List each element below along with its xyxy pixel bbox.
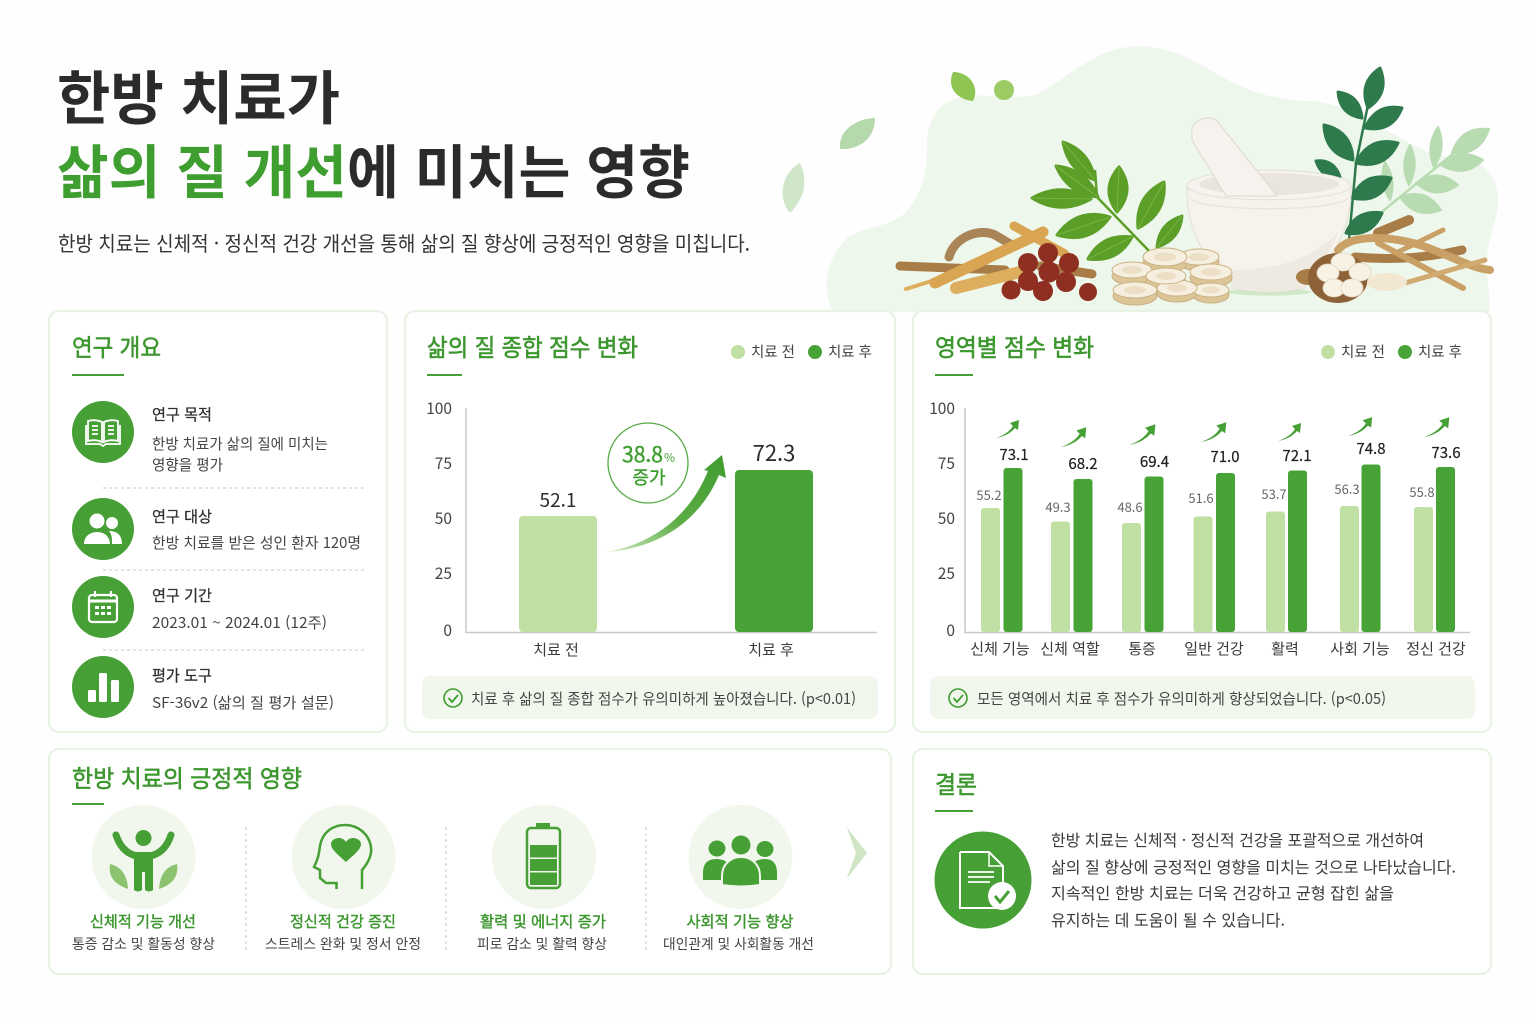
bar chart: 영역별: 0	[946, 619, 955, 641]
illustration: herbal medicine hero	[783, 46, 1498, 312]
conclusion text: 삶의 질 향상에 긍정적인 영향을 미치는 것으로 나타났습니다.	[1051, 854, 1456, 878]
legend: 치료 후	[828, 341, 872, 362]
conclusion text: 한방 치료는 신체적 · 정신적 건강을 포괄적으로 개선하여	[1051, 827, 1424, 851]
bar chart: 영역별: 48.6	[1117, 497, 1143, 516]
item: 연구 기간: 연구 기간	[152, 584, 212, 606]
note: 치료 후 삶의 질 종합 점수가 유의미하게 높아졌습니다. (p<0.01)	[471, 688, 856, 709]
bar chart: 종합 점수: 치료 전	[533, 639, 579, 660]
bar chart: 종합 점수: 50	[435, 507, 452, 529]
item: 정신적 건강 증진	[265, 805, 421, 954]
heading: 결론	[935, 765, 977, 800]
bar chart: 영역별: 신체 역할	[1040, 638, 1100, 659]
bar chart: 영역별: 활력	[1271, 638, 1299, 659]
item: 연구 목적: 영향을 평가	[152, 454, 223, 475]
icon: document check	[934, 832, 1032, 928]
panel: 삶의 질 종합 점수 변화	[405, 311, 895, 732]
panel: 연구 개요	[49, 311, 387, 732]
bar chart: 종합 점수: 72.3	[753, 436, 795, 468]
background blob	[827, 46, 1498, 312]
bar chart: 영역별: 69.4	[1140, 451, 1169, 472]
heading: 삶의 질 종합 점수 변화	[427, 328, 638, 363]
bar chart: 영역별: 72.1	[1282, 445, 1312, 466]
floating leaves	[783, 72, 1014, 213]
item: 연구 대상: 한방 치료를 받은 성인 환자 120명	[152, 532, 361, 553]
item: 사회적 기능 향상: 대인관계 및 사회활동 개선	[663, 934, 814, 954]
item: 정신적 건강 증진: 정신적 건강 증진	[290, 910, 396, 932]
bar chart: 영역별: 75	[938, 452, 955, 474]
item: 평가 도구: SF-36v2 (삶의 질 평가 설문)	[152, 692, 334, 713]
conclusion text: 지속적인 한방 치료는 더욱 건강하고 균형 잡힌 삶을	[1051, 880, 1394, 904]
legend: 치료 후	[1418, 341, 1462, 362]
bar chart: 영역별: 74.8	[1356, 438, 1386, 459]
item: 활력 및 에너지 증가: 활력 및 에너지 증가	[480, 910, 606, 932]
root slices	[1112, 248, 1232, 305]
arrow: chevron	[846, 827, 867, 879]
item: 연구 대상	[72, 498, 361, 560]
bar chart: 영역별: 신체 기능	[970, 638, 1030, 659]
item: 사회적 기능 향상: 사회적 기능 향상	[686, 910, 794, 932]
bar chart: 영역별: 49.3	[1045, 497, 1071, 516]
bar chart: 영역별: 71.0	[1210, 446, 1240, 467]
title	[57, 52, 690, 210]
heading: 영역별 점수 변화	[935, 328, 1094, 363]
legend	[1321, 341, 1462, 362]
heading: 연구 개요	[72, 328, 161, 363]
right roots	[1338, 220, 1490, 288]
callout: 38.8% 증가: %	[664, 449, 675, 466]
note	[422, 676, 878, 719]
bar chart: 영역별: 25	[938, 562, 955, 584]
title: 에 미치는 영향	[347, 126, 690, 210]
callout: 38.8% 증가	[608, 423, 688, 503]
legend: 치료 전	[751, 341, 795, 362]
item: 신체적 기능 개선: 통증 감소 및 활동성 향상	[72, 934, 215, 954]
subtitle: 한방 치료는 신체적 · 정신적 건강 개선을 통해 삶의 질 향상에 긍정적인 영향을 미칩니다.	[58, 227, 750, 257]
bar chart: 영역별: 68.2	[1068, 453, 1098, 474]
bar chart: 영역별: 73.6	[1431, 442, 1461, 463]
bar chart: 영역별: 50	[938, 507, 955, 529]
item: 활력 및 에너지 증가: 피로 감소 및 활력 향상	[477, 934, 607, 954]
bar chart: 영역별: 100	[929, 397, 955, 419]
heading: 한방 치료의 긍정적 영향	[72, 759, 302, 794]
left roots	[900, 226, 1092, 289]
arrow: increase	[607, 455, 726, 552]
bar chart: 영역별: 사회 기능	[1330, 638, 1390, 659]
note	[930, 676, 1475, 719]
item: 평가 도구	[72, 656, 334, 718]
bar chart: 종합 점수: 75	[435, 452, 452, 474]
legend: 치료 전	[1341, 341, 1385, 362]
note: 모든 영역에서 치료 후 점수가 유의미하게 향상되었습니다. (p<0.05)	[977, 688, 1386, 709]
item: 신체적 기능 개선: 신체적 기능 개선	[90, 910, 196, 932]
bar chart: 영역별: 통증	[1128, 638, 1156, 659]
bar chart: 종합 점수: 0	[443, 619, 452, 641]
callout: 38.8% 증가: 38.8	[622, 439, 663, 469]
bar chart: 영역별: 정신 건강	[1406, 638, 1466, 659]
legend	[731, 341, 872, 362]
bar chart: 영역별: 73.1	[999, 444, 1029, 465]
item: 연구 목적: 한방 치료가 삶의 질에 미치는	[152, 433, 328, 454]
panel: 영역별 점수 변화	[913, 311, 1491, 732]
item: 정신적 건강 증진: 스트레스 완화 및 정서 안정	[265, 934, 421, 954]
mortar and pestle	[1187, 118, 1351, 296]
item: 평가 도구: 평가 도구	[152, 664, 212, 686]
bar chart: 영역별: 53.7	[1261, 484, 1287, 503]
bar chart: 영역별: 일반 건강	[1184, 638, 1244, 659]
item: 연구 대상: 연구 대상	[152, 505, 212, 527]
bar chart: 영역별: 55.8	[1409, 482, 1435, 501]
panel: 결론	[913, 749, 1491, 974]
bar chart: 영역별: 55.2	[976, 485, 1002, 504]
item: 신체적 기능 개선	[72, 805, 215, 954]
small increase arrows	[996, 417, 1449, 447]
ginseng root slice	[1296, 253, 1407, 303]
red berries	[1002, 243, 1097, 301]
title: 한방 치료가	[57, 52, 340, 136]
green leaf branch	[1032, 142, 1182, 260]
title: 삶의 질 개선	[57, 126, 347, 210]
item: 활력 및 에너지 증가	[477, 805, 607, 954]
item: 연구 기간	[72, 576, 327, 638]
bar chart: 종합 점수	[426, 397, 877, 660]
light leaf branch	[1378, 127, 1489, 215]
bar chart: 종합 점수: 25	[435, 562, 452, 584]
bar chart: 종합 점수: 100	[426, 397, 452, 419]
bar chart: 영역별: 51.6	[1188, 488, 1214, 507]
item: 사회적 기능 향상	[663, 805, 814, 954]
panel: 한방 치료의 긍정적 영향	[49, 749, 891, 974]
bar chart: 종합 점수: 치료 후	[748, 639, 794, 660]
conclusion text: 유지하는 데 도움이 될 수 있습니다.	[1051, 907, 1285, 931]
item: 연구 목적: 연구 목적	[152, 403, 212, 425]
bar chart: 종합 점수: 52.1	[540, 486, 576, 513]
conclusion text	[1051, 827, 1456, 931]
bar chart: 영역별: 56.3	[1334, 479, 1360, 498]
bar chart: 영역별	[929, 397, 1470, 659]
dark leaf branch	[1316, 68, 1402, 240]
item: 연구 목적	[72, 401, 328, 475]
callout: 38.8% 증가: 증가	[632, 464, 666, 490]
item: 연구 기간: 2023.01 ~ 2024.01 (12주)	[152, 612, 327, 633]
